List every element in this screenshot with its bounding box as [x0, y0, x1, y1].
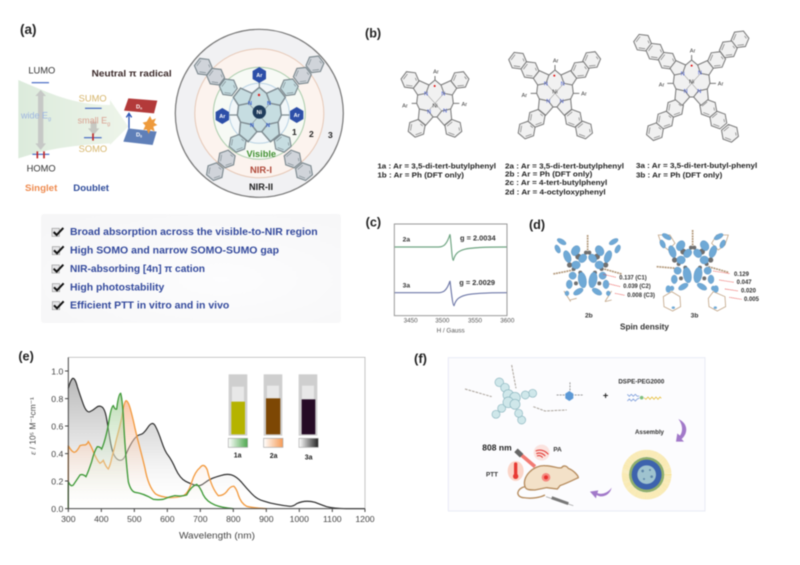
EPR chart: g = 2.0029 [459, 278, 495, 287]
structure 3 [631, 28, 751, 145]
nanoparticle [625, 453, 668, 496]
icon: syringe [546, 497, 573, 506]
energy level diagram: D [136, 133, 140, 139]
spectra chart: 400 [94, 514, 109, 524]
spectra chart: Wavelength (nm) [179, 531, 255, 541]
energy level diagram: Doublet [73, 183, 109, 193]
mouse [518, 466, 578, 498]
DSPE-PEG lipid [618, 378, 665, 401]
molecule illustration [465, 365, 583, 424]
heading: panel c label: (c) [366, 216, 381, 230]
heading: panel f label: (f) [414, 351, 427, 366]
icon: Ni centre [253, 105, 266, 119]
structure 1: Ar [433, 69, 439, 75]
icon: photoacoustic signal: PA [553, 447, 562, 454]
icon: photoacoustic signal [534, 445, 562, 461]
energy level diagram: 0 [140, 135, 142, 139]
EPR chart: 3500 [435, 318, 450, 325]
EPR chart: 3450 [404, 318, 418, 325]
energy level diagram: SUMO [79, 94, 107, 104]
structure 3: N [681, 71, 685, 77]
spectra chart: 700 [193, 514, 208, 524]
concentric absorption circles with molecule: 2 [309, 129, 314, 139]
EPR chart: H / Gauss [437, 328, 465, 335]
structure 3: N [698, 71, 702, 77]
panel e: absorption spectra [18, 349, 375, 541]
energy level diagram: n [140, 107, 142, 111]
text block: properties: Efficient PTT in vitro and in vivo [70, 300, 229, 311]
panel f: nanoparticle photothermal therapy [414, 351, 705, 511]
text block: substituent legends [377, 161, 757, 196]
text block: substituent legends: 2d : Ar = 4-octyloxyphenyl [505, 187, 606, 196]
spectra chart: 0.4 [51, 449, 63, 459]
structure 3: Ar [718, 81, 724, 87]
EPR chart: 3550 [468, 318, 483, 325]
text block: properties: High SOMO and narrow SOMO-SUMO gap [70, 245, 279, 256]
spin density values: 0.047 [737, 280, 752, 286]
arrow: assembly [635, 419, 686, 442]
panel c: EPR spectra [366, 216, 515, 335]
icon: Ar groups: Ar [256, 73, 263, 79]
text block: substituent legends: 3a : Ar = 3,5-di-tert-butyl-phenyl [636, 161, 757, 170]
inset: cuvette photos with legend: 2a [270, 453, 278, 460]
text block: properties: Broad absorption across the visible-to-NIR region [70, 227, 318, 238]
energy level diagram: wide E [21, 111, 48, 121]
spectra chart: 300 [61, 514, 76, 524]
structure 1: N [441, 91, 445, 97]
icon: Ni centre: Ni [257, 110, 263, 116]
concentric absorption circles with molecule: NIR-II [249, 182, 273, 192]
structure 3: N [697, 89, 701, 95]
arrow: assembly: Assembly [635, 429, 664, 436]
energy level diagram [18, 65, 172, 193]
text block: substituent legends: 1a : Ar = 3,5-di-tert-butylphenyl [377, 162, 496, 171]
panel: property checklist [41, 214, 341, 323]
inset: cuvette photos with legend [228, 374, 318, 461]
concentric absorption circles with molecule: N [248, 101, 252, 107]
spectra chart: 0.8 [51, 394, 63, 404]
concentric absorption circles with molecule: 3 [328, 130, 333, 140]
EPR chart: g = 2.0034 [460, 233, 497, 242]
heading: panel d label: (d) [529, 218, 545, 232]
energy level diagram: D [136, 105, 140, 111]
spin density values: 2b [585, 312, 593, 319]
structure 2: N [546, 99, 550, 105]
spin density values: 0.129 [734, 272, 750, 278]
spin density values: 0.005 [744, 297, 760, 303]
spin density values: 0.020 [741, 288, 757, 294]
spectra chart: 500 [127, 514, 142, 524]
panel d: spin density [529, 218, 760, 331]
structure 2: Ni [552, 89, 558, 95]
structure 3: Ni [689, 79, 694, 85]
concentric absorption circles with molecule: 1 [292, 127, 297, 137]
structure 2 [506, 49, 602, 142]
concentric absorption circles with molecule [175, 29, 343, 197]
icon: Ar groups: Ar [219, 114, 226, 120]
DSPE-PEG lipid: DSPE-PEG2000 [618, 378, 665, 385]
spectra chart: 0.0 [51, 504, 63, 514]
concentric absorption circles with molecule: Visible [246, 149, 276, 160]
text block: properties: NIR-absorbing [4n] π cation [70, 264, 205, 275]
icon: check boxes [52, 228, 64, 310]
spectra chart: 1100 [323, 514, 342, 524]
structure 1: N [424, 91, 428, 97]
text block: substituent legends: 3b : Ar = Ph (DFT only) [636, 170, 723, 179]
icon: Ar groups [216, 67, 303, 124]
structure 1 [398, 68, 471, 140]
panel b: molecular structures [365, 27, 757, 196]
structure 2: N [560, 99, 564, 105]
text block: properties: High photostability [70, 282, 165, 293]
frame [448, 358, 705, 511]
concentric absorption circles with molecule: N [266, 123, 270, 129]
text block: properties [70, 227, 318, 311]
text block: substituent legends: 2a : Ar = 3,5-di-tert-butylphenyl [505, 161, 624, 170]
spectra chart: 0.2 [51, 476, 63, 486]
energy level diagram: SOMO [79, 144, 107, 154]
EPR chart: 3600 [500, 318, 515, 325]
spin density 3b [657, 230, 728, 311]
concentric absorption circles with molecule: NIR-I [250, 165, 272, 176]
spin density values: 3b [691, 313, 698, 320]
energy level diagram: g [48, 117, 51, 123]
plus sign: + [603, 391, 609, 401]
icon: Ar groups: Ar [294, 113, 301, 119]
text block: substituent legends: 2b : Ar = Ph (DFT only) [505, 170, 593, 179]
spectra chart: 1.0 [51, 366, 63, 376]
structure 1: Ar [402, 104, 408, 110]
structure 3: Ar [690, 49, 696, 55]
heading: panel a label: (a) [20, 22, 36, 37]
inset: cuvette photos with legend: 1a [234, 453, 242, 460]
structure 1: N [443, 108, 447, 114]
structure 2: Ar [521, 93, 527, 99]
energy level diagram: Neutral π radical [92, 69, 172, 79]
spectra chart: 800 [226, 514, 241, 524]
heading: panel b label: (b) [365, 27, 381, 41]
arrow: injection [590, 488, 612, 498]
inset: cuvette photos with legend: 3a [305, 454, 313, 461]
EPR chart [394, 224, 515, 335]
EPR chart: 3a [403, 282, 410, 289]
energy level diagram: small E [78, 115, 107, 125]
laser [482, 444, 535, 467]
structure 1: Ni [432, 103, 438, 109]
caption: spin density: Spin density [620, 322, 670, 331]
energy level diagram: g [107, 121, 110, 127]
laser: 808 nm [482, 444, 512, 453]
concentric absorption circles with molecule: N [267, 101, 271, 107]
spin density values: 0.137 (C1) [619, 275, 647, 281]
text block: substituent legends: 2c : Ar = 4-tert-butylphenyl [505, 178, 607, 187]
spin density 2b [553, 235, 622, 302]
energy level diagram: HOMO [27, 164, 56, 174]
structure 2: Ar [553, 59, 559, 65]
heading: panel e label: (e) [18, 349, 34, 363]
spectra chart: 1000 [290, 514, 309, 524]
spectra chart: 0.6 [51, 421, 63, 431]
icon: thermometer: PTT [486, 472, 498, 479]
EPR chart: 2a [403, 237, 410, 244]
spin density values: 0.039 (C2) [623, 284, 651, 290]
spectra chart: 900 [259, 514, 274, 524]
structure 2: Ar [581, 92, 587, 98]
text block: substituent legends: 1b : Ar = Ph (DFT only) [377, 170, 464, 179]
concentric absorption circles with molecule: N [250, 123, 254, 129]
spectra chart: 1200 [355, 514, 375, 524]
structure 2: N [561, 81, 565, 87]
spin density values: 0.008 (C3) [627, 293, 655, 299]
structure 1: N [427, 109, 431, 115]
spectra chart [28, 357, 375, 541]
energy level diagram: LUMO [28, 65, 55, 75]
spin density value arrows [603, 271, 742, 299]
structure 3: Ar [659, 82, 665, 88]
panel a: neutral pi radical concept [18, 22, 343, 197]
spectra chart: 600 [160, 514, 175, 524]
structure 2: N [544, 81, 548, 87]
icon: thermometer [486, 461, 524, 481]
spectra chart: ε / 10⁵ M⁻¹cm⁻¹ [28, 397, 38, 455]
energy level diagram: Singlet [25, 183, 57, 193]
structure 1: Ar [461, 102, 467, 108]
spin density values [585, 272, 760, 320]
structure 3: N [684, 89, 688, 95]
